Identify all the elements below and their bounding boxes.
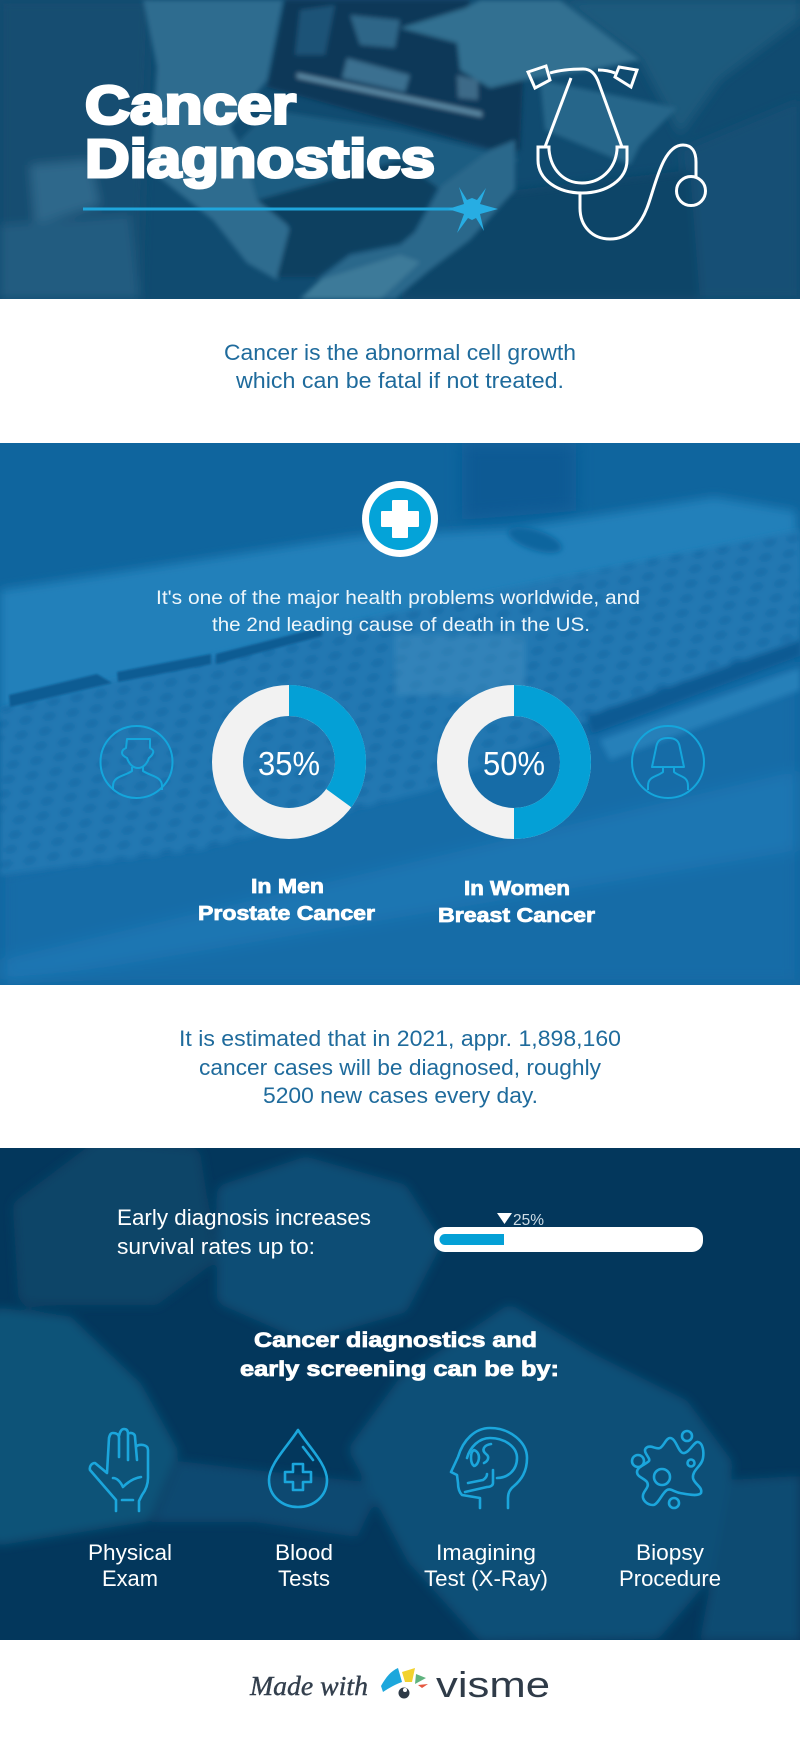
intro text: Cancer is the abnormal cell growth xyxy=(224,340,576,365)
hero photo background xyxy=(0,0,800,299)
label: biopsy procedure: Procedure xyxy=(619,1566,721,1591)
estimate text: It is estimated that in 2021, appr. 1,898,160 xyxy=(179,1026,621,1051)
survival rate text xyxy=(117,1205,371,1259)
method: imaging test xyxy=(424,1428,548,1591)
label: blood tests: Blood xyxy=(275,1540,333,1565)
label: women breast cancer xyxy=(438,878,595,927)
label: biopsy procedure xyxy=(619,1540,721,1591)
visme wordmark: visme xyxy=(436,1664,550,1705)
title: Cancer xyxy=(85,76,296,136)
donut chart: women 50% xyxy=(452,700,576,824)
label: biopsy procedure: Biopsy xyxy=(636,1540,704,1565)
icon: stethoscope xyxy=(528,66,706,239)
heading: screening xyxy=(240,1329,559,1381)
label: men prostate cancer: Prostate Cancer xyxy=(198,903,375,925)
panel: early diagnosis xyxy=(0,1148,800,1640)
method: physical exam xyxy=(88,1429,172,1591)
panel: intro statement xyxy=(0,299,800,443)
icon: man xyxy=(100,726,172,798)
estimate text: 5200 new cases every day. xyxy=(263,1083,538,1108)
label: women breast cancer: In Women xyxy=(464,878,570,900)
label: physical exam: Physical xyxy=(88,1540,172,1565)
panel: statistics xyxy=(0,443,800,985)
title: Diagnostics xyxy=(85,129,435,189)
panel: hero header xyxy=(0,0,800,299)
label: men prostate cancer xyxy=(198,876,375,925)
visme logo mark xyxy=(381,1668,428,1698)
survival rate text: Early diagnosis increases xyxy=(117,1205,371,1230)
title xyxy=(85,76,435,189)
label: physical exam xyxy=(88,1540,172,1591)
donut chart: men 35%: 35% xyxy=(258,745,320,782)
icon: blood drop xyxy=(269,1430,327,1507)
icon: biopsy cell xyxy=(632,1431,703,1508)
label: imaging test: Imagining xyxy=(436,1540,536,1565)
label: blood tests xyxy=(275,1540,333,1591)
label: women breast cancer: Breast Cancer xyxy=(438,905,595,927)
icon: hand xyxy=(90,1429,148,1511)
statistics intro text xyxy=(156,587,640,636)
survival rate text: survival rates up to: xyxy=(117,1234,315,1259)
heading: screening: early screening can be by: xyxy=(240,1358,559,1381)
estimate text xyxy=(179,1026,621,1108)
donut chart: women 50%: 50% xyxy=(483,745,545,782)
donut chart: men 35% xyxy=(228,700,350,824)
made with script: Made with xyxy=(249,1671,368,1701)
progress bar 25% xyxy=(434,1212,703,1252)
intro text xyxy=(224,340,576,393)
label: imaging test xyxy=(424,1540,548,1591)
method: biopsy procedure xyxy=(619,1431,721,1591)
label: men prostate cancer: In Men xyxy=(251,876,324,898)
cell photo background xyxy=(0,1148,800,1640)
progress bar 25%: 25% xyxy=(513,1212,544,1229)
heading: screening: Cancer diagnostics and xyxy=(254,1329,537,1352)
icon: woman xyxy=(632,726,704,798)
icon: medical plus xyxy=(362,481,438,557)
lab photo background xyxy=(0,443,800,985)
label: blood tests: Tests xyxy=(278,1566,330,1591)
title underline with sparkle xyxy=(83,187,498,233)
statistics intro text: It's one of the major health problems worldwide, and xyxy=(156,587,640,609)
footer: made with visme xyxy=(0,1640,800,1739)
statistics intro text: the 2nd leading cause of death in the US. xyxy=(212,614,590,636)
icon: head x-ray xyxy=(451,1428,527,1508)
panel: estimate statement xyxy=(0,985,800,1148)
label: imaging test: Test (X-Ray) xyxy=(424,1566,548,1591)
estimate text: cancer cases will be diagnosed, roughly xyxy=(199,1055,601,1080)
label: physical exam: Exam xyxy=(102,1566,158,1591)
method: blood tests xyxy=(269,1430,333,1591)
intro text: which can be fatal if not treated. xyxy=(235,368,564,393)
